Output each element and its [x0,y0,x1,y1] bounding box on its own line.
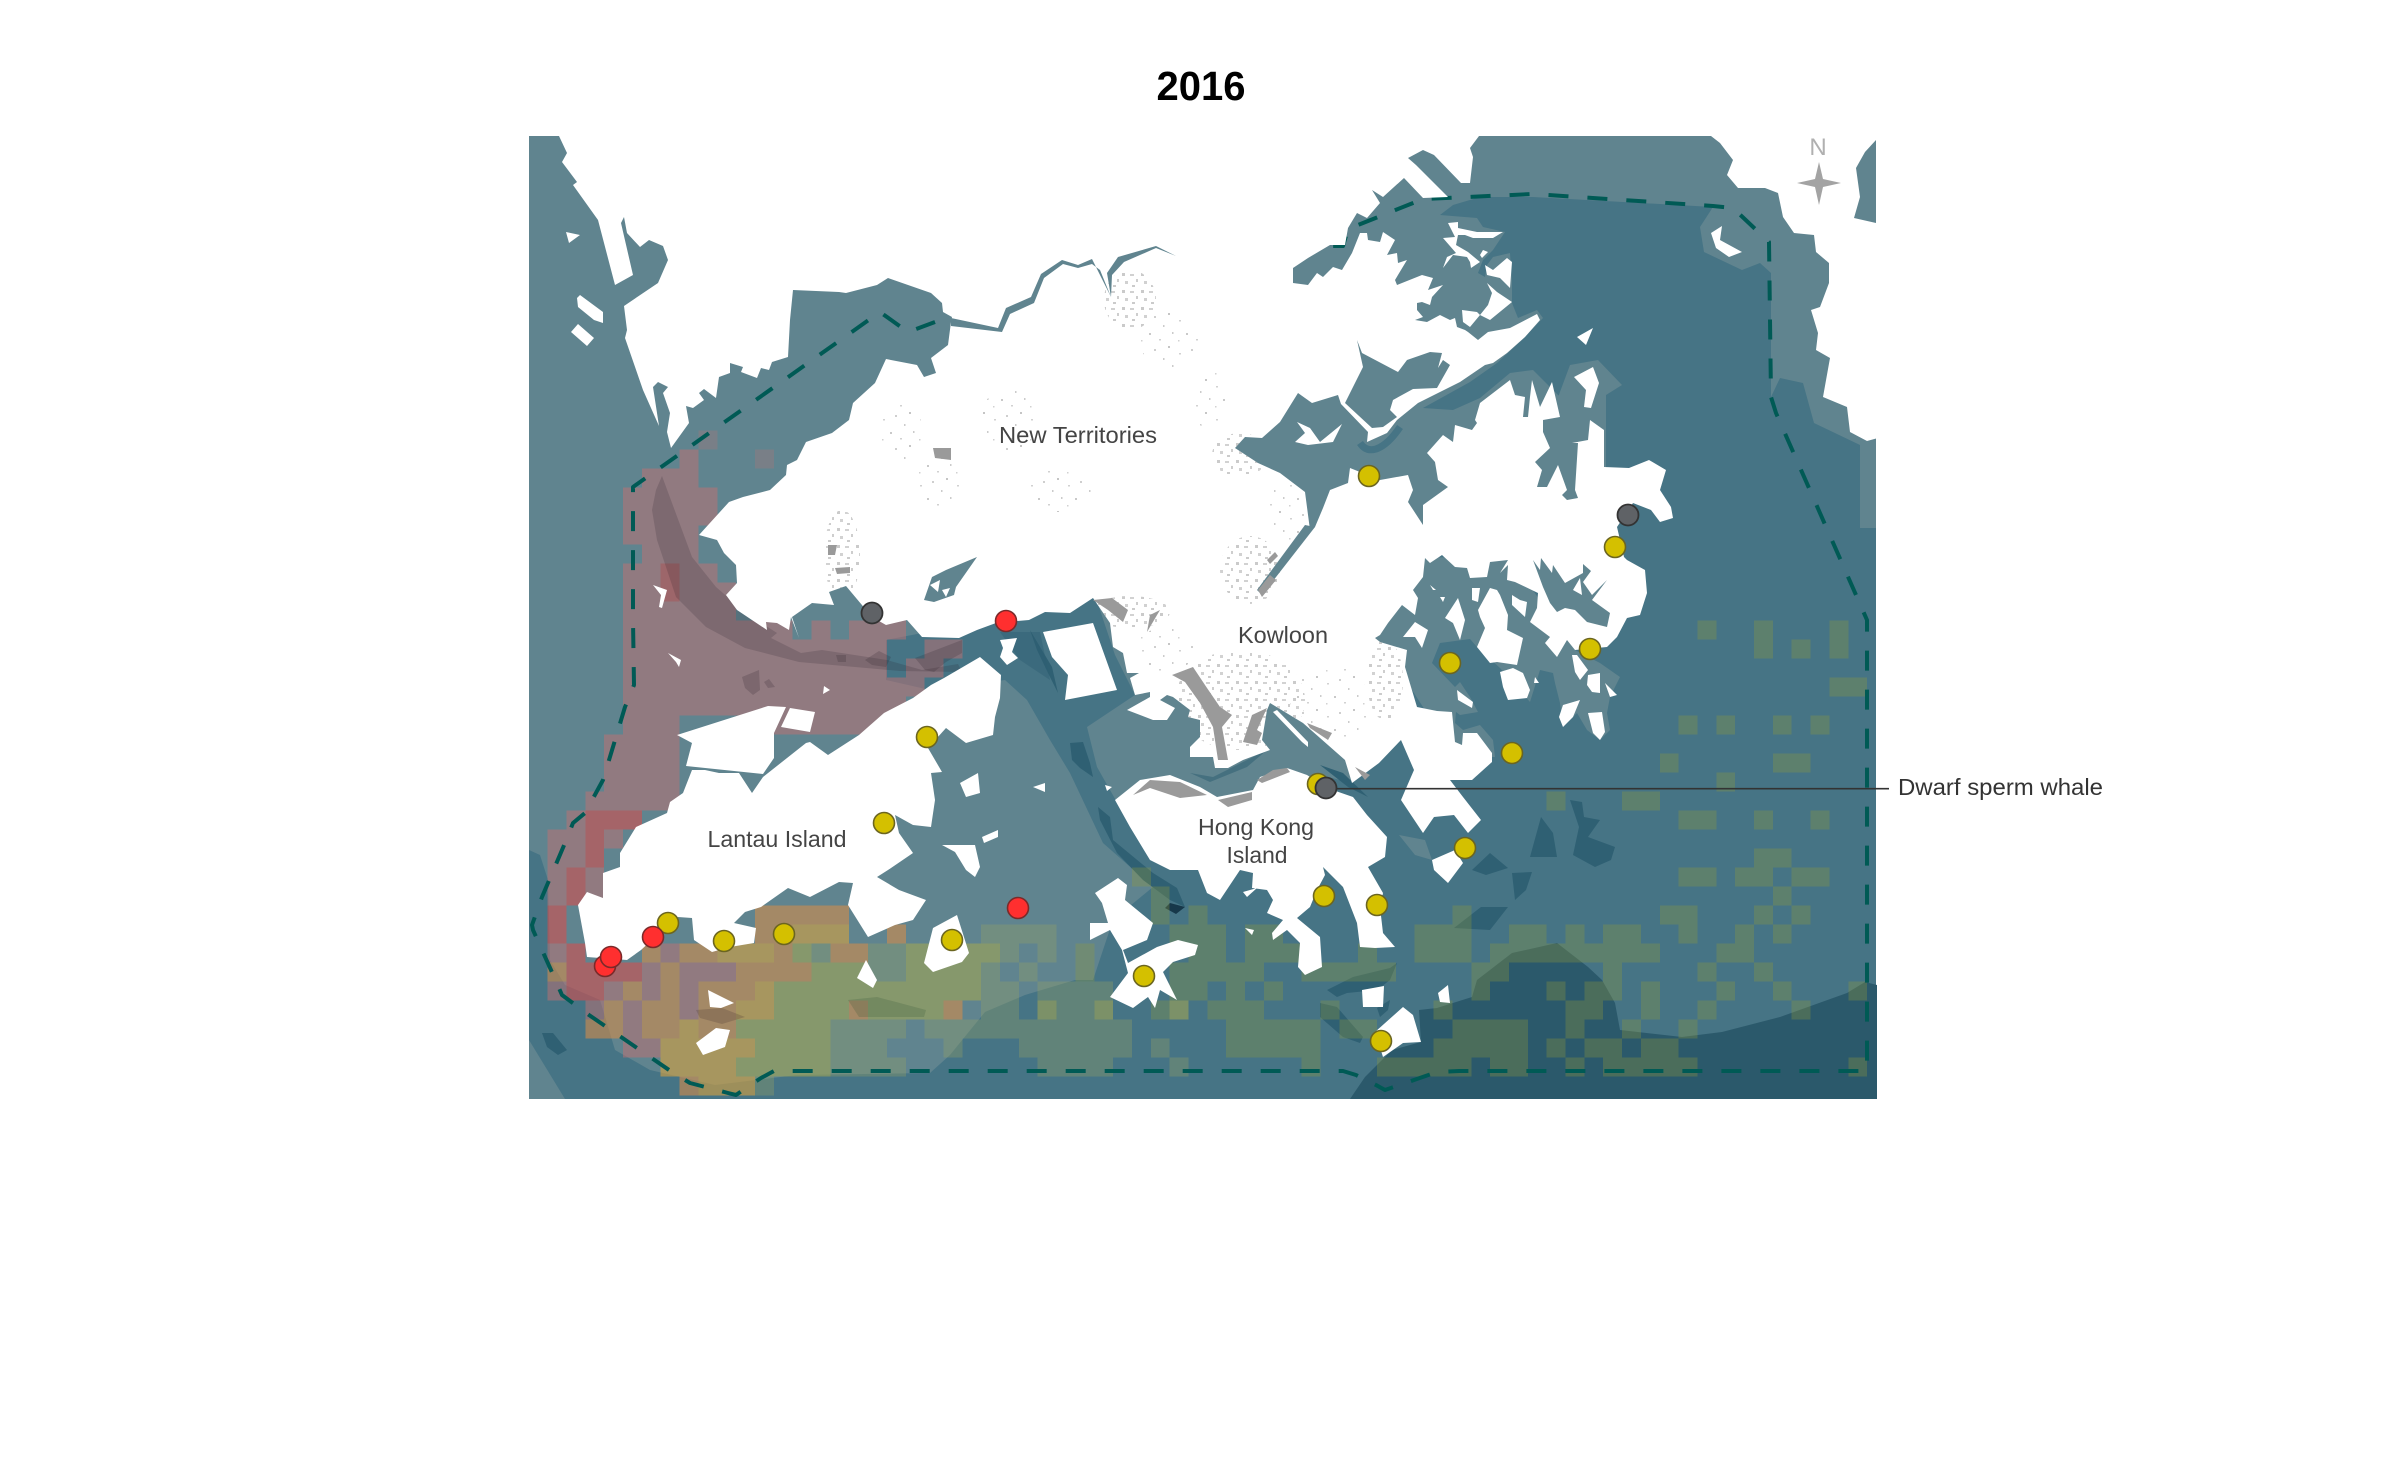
Tsing Shan inlet holes [930,580,950,597]
water: far north east corner [1854,140,1876,223]
water: light patch off Clear Water Bay [1399,835,1432,860]
grid: red highlight cell [661,564,680,602]
Kai Tak runway [1273,710,1308,747]
stranding markers: yellow [658,466,1626,1052]
dark bathymetry patches [542,630,1615,1055]
stranding markers: red [594,610,1028,976]
water: Deep Bay river [951,246,1176,332]
Ma Wan [1000,638,1018,665]
map of Hong Kong waters [529,130,2103,1099]
grid: yellow-tan cells [661,924,849,1096]
water: Tolo Harbour curve [1360,427,1400,450]
airport annex [781,708,815,732]
place label: New Territories: New Territories [999,422,1157,448]
shallow water base [529,136,1876,1099]
water: upper Port Shelter inlet [1533,558,1610,627]
icon: north compass [1797,134,1841,205]
small southern and western islands [696,773,1463,1057]
darker shipping corridor across the pink zone [652,476,962,672]
stranding markers: grey [862,504,1638,798]
grid: grey-olive cells [755,924,1188,1096]
small north western islands [566,232,830,694]
Lantau Island [578,657,1001,960]
place label: Hong Kong Island: Island [1226,842,1288,868]
place label: Kowloon: Kowloon [1238,622,1328,648]
water: Plover Cove reservoir [1345,340,1450,428]
land: north east mainland [1711,130,1878,441]
grid: low intensity cells [698,430,774,468]
Tsing Yi [1043,623,1117,700]
islands and outlying land [566,222,1742,1057]
Lamma Island [1090,878,1198,1008]
species label: Dwarf sperm whale [1898,774,2103,800]
grid: olive cells [736,944,1188,1076]
Double Haven islands [1443,222,1742,408]
grid: pink cells [548,450,962,1058]
Chek Lap Kok airport [677,706,786,774]
Tolo Harbour island [1295,422,1342,445]
place label: Hong Kong Island: Hong Kong [1198,814,1314,840]
place label: Hong Kong Island [1198,814,1314,868]
icon: north compass: N [1809,134,1827,161]
grid: tan cells [548,906,962,1096]
place label: Lantau Island: Lantau Island [708,826,846,852]
shallow water: Port Shelter [1380,555,1620,757]
dark patches within the pink zone [742,640,962,695]
brown patch on Soko islands [696,1008,745,1024]
land: New Territories and Kowloon [559,135,1673,833]
water: Tsing Shan inlet [924,557,977,602]
dashed Hong Kong boundary line [532,194,1867,1095]
shallow water: Long Harbour and High Island [1530,360,1622,505]
water: Shing Mun channel [1257,525,1315,595]
deep water layer [529,197,1876,1099]
title: 2016 [1156,63,1246,109]
leader line to dwarf sperm whale label [1326,788,1889,790]
Hong Kong Island [1115,768,1395,975]
Port Shelter islands [1403,578,1617,740]
very dark blob in East Lamma Channel [1165,903,1185,914]
darker strip near Shek Kwu Chau [848,997,926,1017]
built-up speckle [824,270,1403,750]
grid: dull green cells over deep water [1075,620,1867,1076]
grid: red cells [548,810,642,1000]
Grey urban blocks [828,448,1370,807]
deepest sea, south east [1350,943,1877,1099]
